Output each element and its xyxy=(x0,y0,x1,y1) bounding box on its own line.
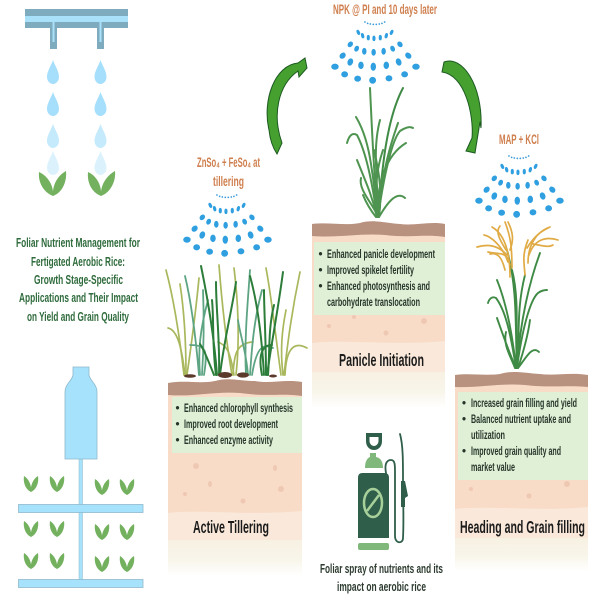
caption: foliar spray: impact on aerobic rice xyxy=(337,579,426,594)
icon: drip pipe with water drops xyxy=(25,9,128,175)
panel: active tillering soil xyxy=(168,379,302,576)
list: panicle initiation effects: Enhanced panicle development xyxy=(327,249,435,261)
arrow: panicle initiation to heading xyxy=(442,61,481,153)
spray: heading xyxy=(476,155,563,217)
list: panicle initiation effects: Enhanced photosynthesis and xyxy=(327,281,430,293)
label: MAP + KCl: MAP + KCl xyxy=(499,131,539,147)
list: heading effects: • xyxy=(462,446,466,458)
list: panicle initiation effects xyxy=(318,249,435,309)
icon: fertigation bottle and lines xyxy=(18,367,143,588)
list: panicle initiation effects: • xyxy=(318,281,323,293)
list: active tillering effects: Enhanced chlorophyll synthesis xyxy=(184,403,293,415)
heading: panicle initiation: Panicle Initiation xyxy=(339,350,424,370)
title: Fertigated Aerobic Rice: xyxy=(31,255,125,269)
list: heading effects: • xyxy=(462,414,466,426)
list: panicle initiation effects: • xyxy=(318,249,323,261)
list: heading effects: market value xyxy=(471,462,515,474)
list: active tillering effects: • xyxy=(176,435,180,447)
list: panicle initiation effects: carbohydrate translocation xyxy=(327,297,420,309)
list: heading effects xyxy=(462,398,577,474)
list: active tillering effects: Improved root development xyxy=(184,419,278,431)
title: Applications and Their Impact xyxy=(19,291,139,305)
list: active tillering effects: • xyxy=(176,403,180,415)
icon: left seedling xyxy=(39,171,66,196)
spray: panicle initiation xyxy=(332,21,419,83)
caption: foliar spray: Foliar spray of nutrients and its xyxy=(320,561,443,576)
label: tillering nutrients xyxy=(197,154,260,189)
list: panicle initiation effects: • xyxy=(318,265,323,277)
title: on Yield and Grain Quality xyxy=(27,310,129,324)
panel: panicle initiation soil xyxy=(312,221,445,408)
icon: knapsack sprayer xyxy=(358,433,408,550)
list: heading effects: utilization xyxy=(471,430,505,442)
caption: foliar spray xyxy=(320,561,443,594)
plant: panicle initiation rice xyxy=(347,88,413,217)
plant: heading rice with golden panicles xyxy=(477,222,558,368)
icon: right seedling xyxy=(88,171,115,196)
arrow: tillering to panicle initiation xyxy=(267,58,307,154)
list: heading effects: • xyxy=(462,398,466,410)
list: panicle initiation effects: Improved spikelet fertility xyxy=(327,265,414,277)
list: active tillering effects: Enhanced enzyme activity xyxy=(184,435,273,447)
heading: active tillering: Active Tillering xyxy=(193,517,269,537)
panel: heading and grain filling soil xyxy=(455,372,588,571)
title: Growth Stage-Specific xyxy=(34,273,123,287)
title: Foliar Nutrient Management for xyxy=(16,236,140,250)
title xyxy=(16,236,140,324)
plants: tillering rice clumps xyxy=(166,265,307,378)
spray: tillering xyxy=(184,194,271,256)
list: active tillering effects xyxy=(176,403,293,447)
list: active tillering effects: • xyxy=(176,419,180,431)
label: tillering nutrients: ZnSo₄ + FeSo₄ at xyxy=(197,154,260,170)
label: tillering nutrients: tillering xyxy=(213,173,244,189)
label: NPK timing: NPK @ PI and 10 days later xyxy=(333,1,437,17)
